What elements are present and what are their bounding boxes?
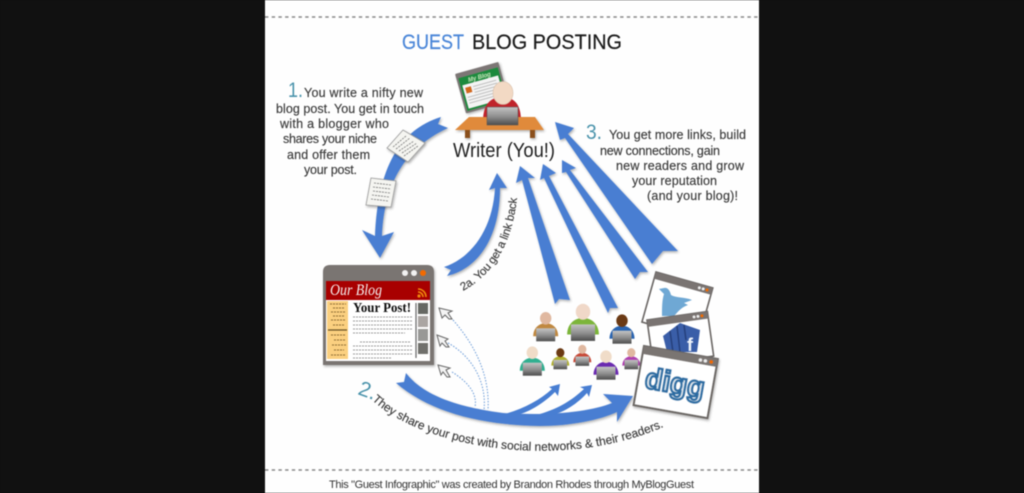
text block: step 1: blog post. You get in touch bbox=[276, 102, 424, 116]
icon: twitter window bbox=[642, 272, 713, 338]
text block: step 1: shares your niche bbox=[283, 132, 377, 146]
icon: reader orange bbox=[533, 312, 558, 341]
icon: my blog window: My Blog bbox=[468, 72, 492, 84]
text block: step 1: You write a nifty new bbox=[304, 86, 424, 100]
icon: facebook window: f bbox=[687, 335, 694, 355]
icon: reader red bbox=[573, 345, 591, 366]
icon: reader purple bbox=[594, 350, 618, 380]
title bbox=[402, 31, 622, 54]
title: GUEST bbox=[402, 31, 464, 54]
text block: step 3: You get more links, build bbox=[609, 128, 746, 142]
label: writer: Writer (You!) bbox=[453, 140, 555, 162]
arrow: social network arrow to writer bbox=[555, 122, 678, 264]
icon: reader olive bbox=[551, 348, 569, 369]
arrow: reader arrow 2 bbox=[540, 164, 618, 313]
illustration: writer at desk bbox=[455, 62, 544, 138]
text block: step 3: your reputation bbox=[632, 174, 717, 188]
icon: digg window: digg bbox=[643, 362, 707, 405]
icon: facebook window bbox=[647, 312, 714, 365]
icon: reader teal bbox=[520, 346, 545, 376]
arrow: link back to writer bbox=[444, 173, 507, 276]
icon: our blog window: Our Blog bbox=[330, 282, 382, 299]
text block: step 1: and offer them bbox=[287, 148, 370, 162]
footer credit: This "Guest Infographic" was created by Brandon Rhodes through MyBlogGuest bbox=[329, 479, 694, 491]
arrow: writer post to blog bbox=[362, 117, 448, 258]
text block: step 2: They share your post with social networks & their readers. bbox=[374, 394, 664, 452]
text block: step 1: your post. bbox=[304, 163, 357, 177]
icon: reader magenta bbox=[622, 348, 640, 369]
text block: step 1: 1. bbox=[288, 79, 303, 102]
icon: paper sheet 1 bbox=[387, 130, 425, 162]
icon: laptop bbox=[487, 107, 518, 125]
icon: desk bbox=[455, 117, 544, 138]
icon: our blog window: Your Post! bbox=[353, 300, 411, 315]
illustration: readers group bbox=[520, 304, 640, 380]
text block: step 1: with a blogger who bbox=[279, 117, 389, 131]
label: step 2 number: 2. bbox=[355, 377, 380, 405]
title: BLOG POSTING bbox=[472, 31, 622, 54]
white page panel bbox=[265, 0, 759, 493]
icon: rss bbox=[418, 289, 426, 297]
arrow: share branch 2 bbox=[540, 385, 592, 415]
text block: step 3: new readers and grow bbox=[616, 159, 745, 173]
icon: digg window bbox=[634, 346, 718, 418]
text block: step 3: 3. bbox=[586, 121, 602, 144]
text block: step 3: (and your blog)! bbox=[647, 189, 738, 203]
icon: paper sheet 2 bbox=[366, 178, 396, 207]
icon: our blog window bbox=[323, 265, 434, 365]
text block: step 3: new connections, gain bbox=[600, 144, 720, 158]
icon: dotted share trails with cursors bbox=[437, 308, 488, 410]
icon: reader blue bbox=[610, 314, 634, 344]
text block: step 3 bbox=[586, 121, 746, 203]
label: step 2a: 2a. You get a link back bbox=[460, 197, 518, 292]
arrow: reader arrow 3 bbox=[562, 160, 648, 279]
arrow: share to social networks bbox=[396, 373, 633, 426]
text block: step 1 bbox=[276, 79, 424, 177]
arrow: reader arrow 1 bbox=[516, 166, 570, 304]
icon: reader green bbox=[567, 304, 599, 341]
icon: writer head and body bbox=[483, 82, 521, 121]
arrow: share branch 1 bbox=[505, 384, 560, 415]
